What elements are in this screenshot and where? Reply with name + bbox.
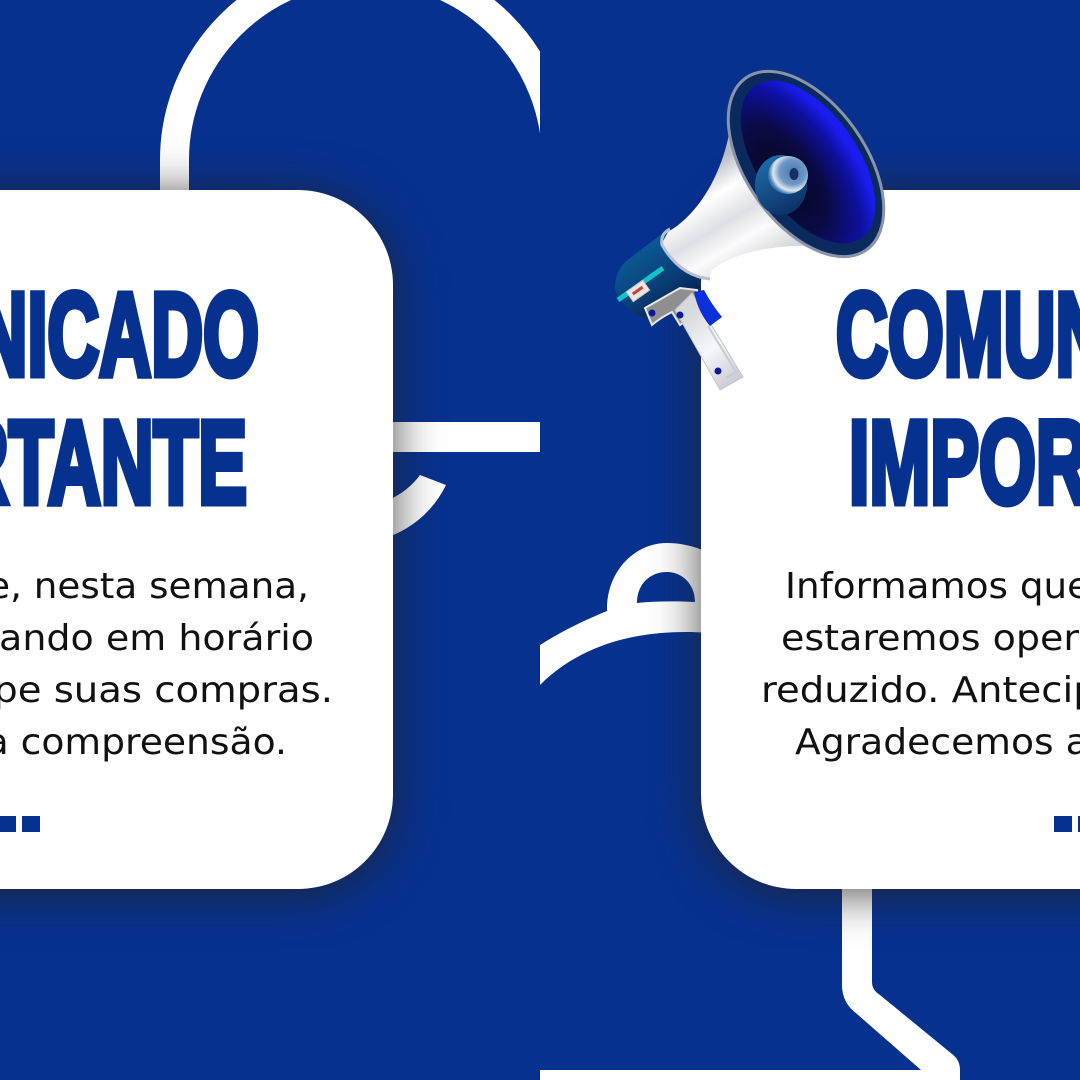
red switch (626, 280, 650, 302)
dots (0, 816, 40, 832)
decorative path: bottom line (540, 870, 960, 1080)
decorative ring: top left (174, 0, 556, 195)
body text (0, 566, 333, 763)
panel: right card (701, 190, 1080, 889)
speaker (755, 155, 808, 215)
bracket (645, 288, 703, 325)
panel: left card (0, 190, 393, 889)
heading (0, 269, 259, 529)
neck ring (662, 229, 710, 279)
bell interior (714, 57, 902, 267)
body text (761, 566, 1080, 763)
decorative bar: middle left (330, 422, 540, 452)
handle strip (708, 326, 736, 378)
bell rim (697, 44, 915, 284)
card shape (0, 190, 393, 889)
dots (1054, 816, 1080, 832)
heading (836, 269, 1080, 529)
megaphone back cylinder (615, 233, 700, 318)
decorative loop arc: centre (540, 543, 701, 685)
handle (675, 293, 743, 390)
card shape (701, 190, 1080, 889)
decorative arc: middle left (350, 475, 446, 543)
screws (648, 310, 722, 374)
icon: megaphone (615, 44, 915, 390)
trigger (694, 290, 722, 326)
horn (662, 120, 840, 279)
cyan stripe (618, 268, 663, 300)
